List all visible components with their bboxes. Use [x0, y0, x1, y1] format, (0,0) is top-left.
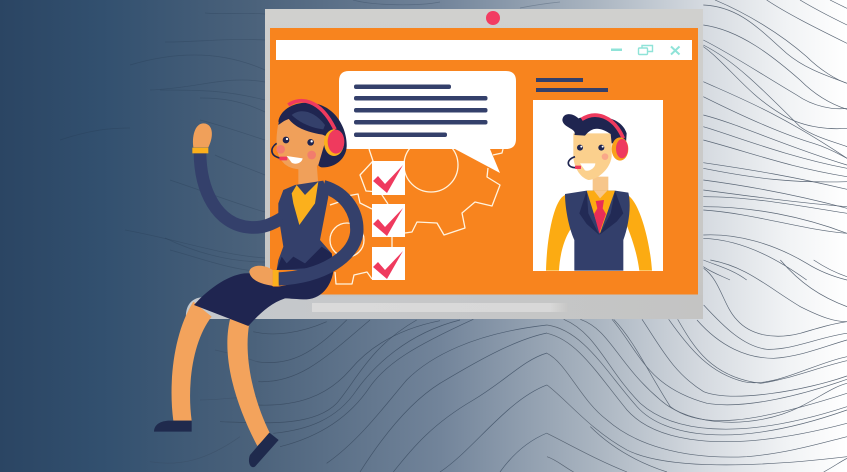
- wavy line pattern: faint left and top: [60, 0, 560, 272]
- gear outlines: [330, 138, 503, 284]
- camera dot: [486, 11, 500, 25]
- icon: restore: [638, 46, 652, 54]
- wavy line pattern: upper right: [703, 0, 847, 280]
- bubble text lines: [354, 84, 488, 137]
- wavy line pattern: lower middle: [150, 319, 547, 472]
- monitor bottom ledge: [186, 295, 703, 319]
- monitor bezel: [265, 9, 703, 319]
- window title bar: [276, 40, 692, 60]
- upper body: [192, 101, 357, 326]
- male agent figure: [546, 114, 652, 271]
- profile heading lines: [536, 78, 608, 92]
- icon: close: [671, 46, 680, 54]
- bottom highlight strip: [312, 303, 568, 312]
- wavy line pattern: lower right: [547, 260, 847, 472]
- female agent figure: [154, 101, 357, 467]
- legs and shoes: [154, 302, 279, 467]
- monitor: [186, 9, 703, 319]
- profile photo panel: [533, 100, 663, 271]
- orange screen: [270, 28, 698, 294]
- checklist: [372, 161, 405, 280]
- icon: minimize: [611, 48, 622, 51]
- speech bubble: [339, 71, 516, 173]
